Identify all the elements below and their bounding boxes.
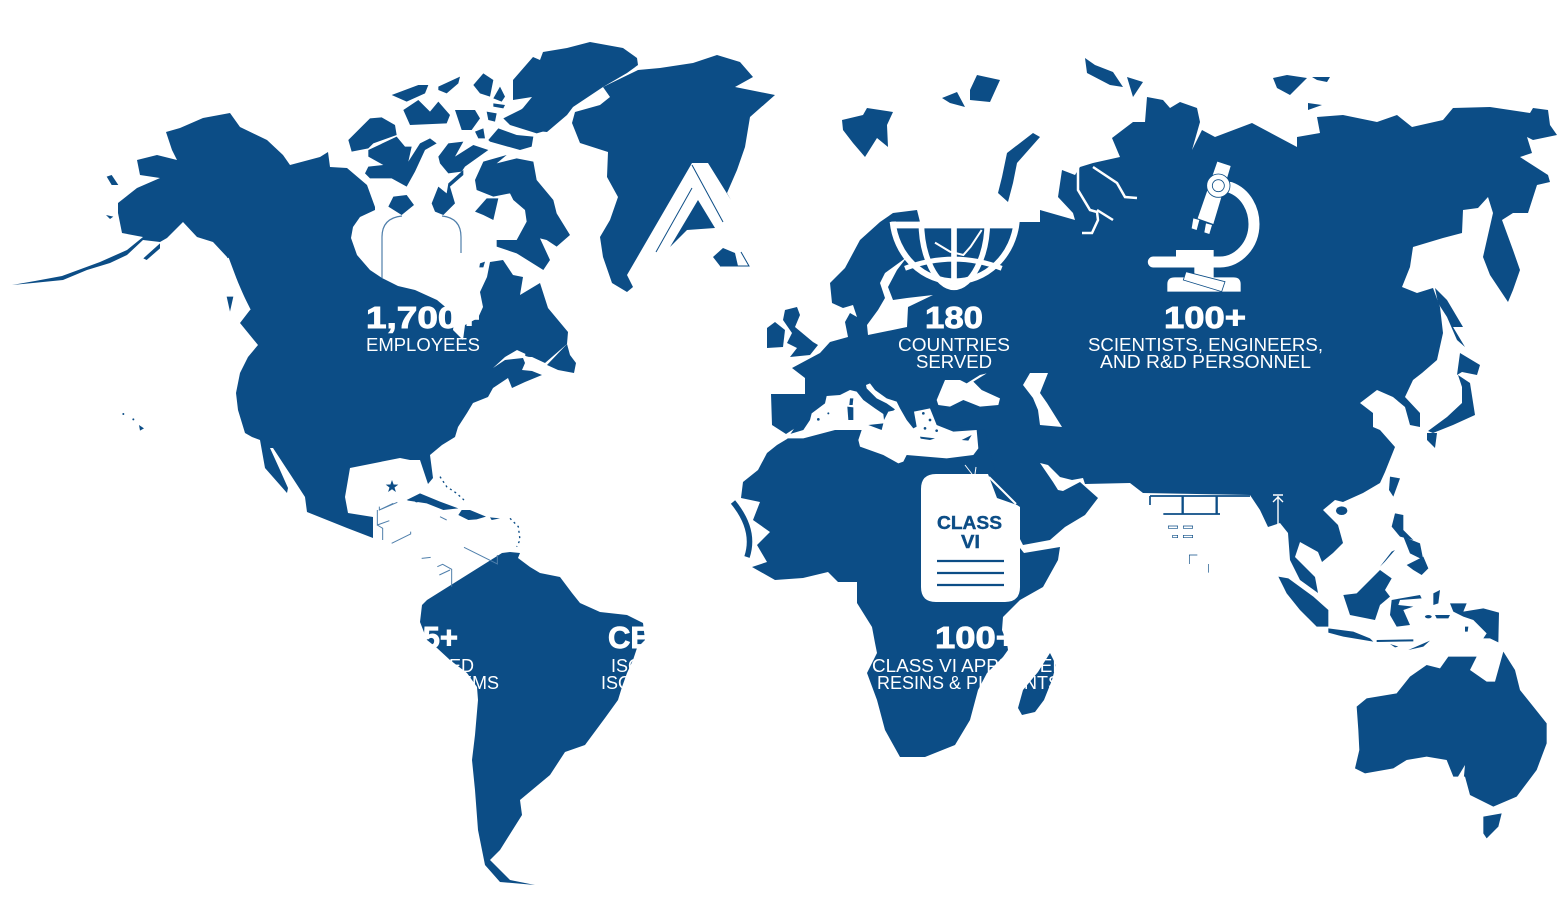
stat: employees: EMPLOYEES [366,335,480,355]
island: Newfoundland [547,344,576,373]
stat: countries served [898,300,1010,372]
stat: employees: 1,700+ [366,300,480,335]
stat: R&D personnel [1088,300,1323,372]
stat: countries served: 180 [925,300,983,335]
icon: factory outline [377,502,497,587]
icon: Class VI document [921,465,1020,602]
stat: R&D personnel: SCIENTISTS, ENGINEERS, [1088,335,1323,355]
stat: licensed systems: 15+ [405,620,458,655]
stat: licensed systems: QUALITY SYSTEMS [331,673,499,693]
island: Madagascar [1018,653,1056,715]
stat: Class VI resins: CLASS VI APPROVED [872,656,1066,676]
stat: R&D personnel: 100+ [1164,300,1246,335]
continent: South America [420,552,645,885]
Caribbean islands [407,477,520,547]
star marker [386,480,398,492]
islands: Alaska, Hawaii and Pacific coast [106,175,233,431]
stat: Class VI resins [872,620,1066,693]
arrow [1273,495,1283,525]
continent: North America [12,113,568,538]
stat: licensed systems [331,620,499,693]
Caspian Sea [1023,373,1062,427]
icon: gear arc [733,502,750,557]
island: Greenland [572,55,775,292]
continent: Africa [741,420,1060,757]
stat: Class VI resins: 100+ [935,620,1017,655]
stat: employees [366,300,480,355]
islands: Southeast Asia and Australia [1278,477,1547,838]
stat: certifications: ISO [601,673,632,693]
icon: Class VI document: CLASS [937,513,1002,533]
Mediterranean and Black Sea [783,373,1000,463]
islands: Canadian Arctic archipelago [348,73,570,270]
icon: Class VI document: VI [961,532,980,552]
island: Anticosti [525,353,537,357]
logo lines [656,165,749,266]
stat: licensed systems: LICENSED [384,656,474,676]
stat: certifications: CE [608,620,651,655]
Greenland inner triangle [670,200,715,247]
stat: certifications: ISO [611,656,642,676]
islands: Sakhalin and Japan [1427,288,1480,448]
small islands: Britain and Ireland [767,307,818,357]
icon: globe [891,222,1019,288]
stat: R&D personnel: AND R&D PERSONNEL [1100,352,1311,372]
stat: Class VI resins: RESINS & PIGMENTS [877,673,1060,693]
stat: countries served: SERVED [916,352,992,372]
Siberian river gulfs [1078,167,1137,233]
stat: countries served: COUNTRIES [898,335,1010,355]
islands: Svalbard and Arctic Russia [842,58,1330,202]
Pacific coast fjord detail [228,258,250,310]
island: Ellesmere [510,42,638,132]
icon: people [382,216,461,278]
continent: Eurasia [771,97,1557,593]
icon: microscope [1153,162,1254,292]
Baltic Sea [867,257,933,335]
icon: India building outline [1150,496,1250,573]
stat: certifications [601,620,651,693]
island: Iceland [713,248,738,266]
